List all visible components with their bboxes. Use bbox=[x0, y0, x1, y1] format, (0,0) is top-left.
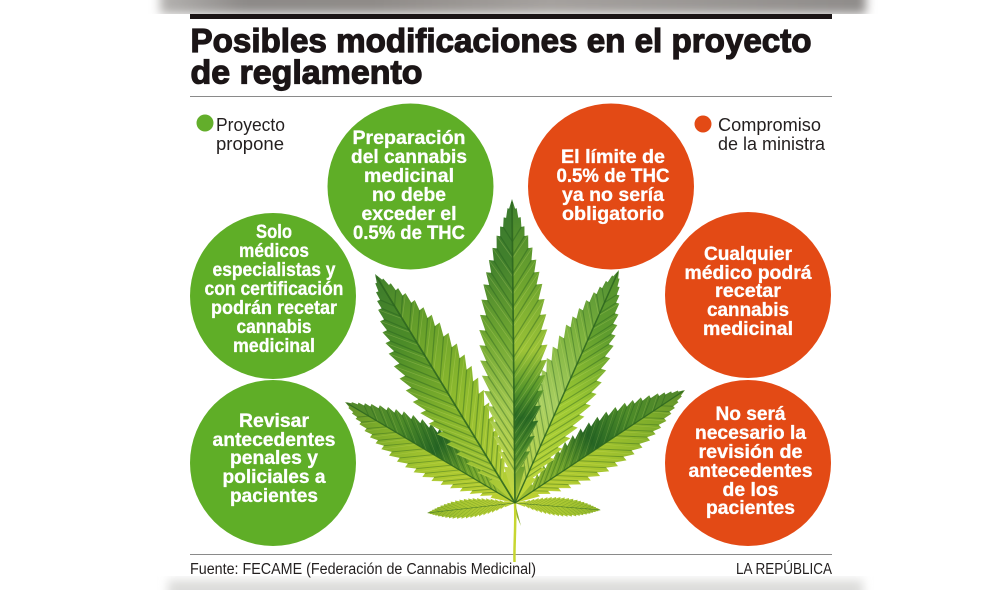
orange circle: no sera necesario: antecedentes bbox=[688, 461, 812, 482]
orange circle: cualquier medico: cannabis bbox=[707, 300, 789, 321]
heading bar bbox=[190, 14, 832, 19]
green circle: medicos: médicos bbox=[239, 241, 309, 262]
green circle: preparacion: 0.5% de THC bbox=[353, 223, 465, 244]
orange circle: no sera necesario: necesario la bbox=[695, 423, 806, 444]
title: de reglamento bbox=[190, 54, 422, 92]
orange circle: no sera necesario: pacientes bbox=[706, 498, 795, 519]
orange circle: limite: obligatorio bbox=[562, 204, 664, 225]
green circle: antecedentes: Revisar bbox=[239, 411, 310, 432]
orange circle: limite: El límite de bbox=[561, 147, 665, 168]
green circle: antecedentes: policiales a bbox=[222, 467, 326, 488]
legend: proyecto propone bbox=[196, 114, 285, 154]
green circle: antecedentes bbox=[190, 380, 356, 546]
credit text: LA REPÚBLICA bbox=[736, 561, 833, 578]
legend: proyecto propone: propone bbox=[216, 134, 284, 154]
green circle: preparacion: no debe bbox=[372, 185, 446, 206]
legend: compromiso de la ministra bbox=[694, 115, 826, 154]
background: blurred bottom band bbox=[168, 580, 863, 590]
orange circle: limite: ya no sería bbox=[562, 185, 664, 206]
title bbox=[190, 23, 812, 92]
orange circle: cualquier medico: Cualquier bbox=[704, 244, 793, 265]
orange circle: no sera necesario bbox=[665, 380, 831, 546]
orange circle: limite bbox=[528, 104, 694, 270]
legend: proyecto propone: Proyecto bbox=[216, 115, 285, 135]
green circle: preparacion: Preparación bbox=[352, 128, 466, 149]
green circle: medicos: cannabis bbox=[236, 317, 312, 338]
green circle: antecedentes: pacientes bbox=[230, 486, 318, 507]
green circle: medicos bbox=[190, 213, 356, 379]
green circle: preparacion: del cannabis bbox=[351, 147, 467, 168]
orange circle: cualquier medico: recetar bbox=[715, 281, 782, 302]
orange circle: no sera necesario: de los bbox=[722, 480, 778, 501]
legend: compromiso de la ministra: Compromiso bbox=[718, 115, 821, 135]
green circle: antecedentes: penales y bbox=[230, 448, 318, 469]
orange circle: limite: 0.5% de THC bbox=[556, 166, 670, 187]
green circle: preparacion: exceder el bbox=[362, 204, 456, 225]
background: blurred top band bbox=[160, 0, 866, 14]
footer rule bbox=[190, 554, 832, 555]
icon: cannabis leaf bbox=[332, 199, 700, 562]
green circle: medicos: Solo bbox=[256, 222, 292, 243]
orange circle: cualquier medico: medicinal bbox=[703, 319, 793, 340]
green circle: medicos: especialistas y bbox=[212, 260, 336, 281]
green circle: medicos: medicinal bbox=[233, 336, 315, 357]
orange circle: cualquier medico bbox=[665, 212, 831, 378]
green circle: medicos: con certificación bbox=[204, 279, 344, 300]
green circle: antecedentes: antecedentes bbox=[212, 430, 336, 451]
orange circle: no sera necesario: No será bbox=[716, 404, 786, 425]
green circle: preparacion: medicinal bbox=[364, 166, 454, 187]
title: Posibles modificaciones en el proyecto bbox=[190, 23, 812, 60]
orange circle: no sera necesario: revisión de bbox=[698, 442, 802, 463]
legend: compromiso de la ministra: de la ministra bbox=[718, 134, 826, 154]
orange circle: cualquier medico: médico podrá bbox=[684, 263, 812, 284]
green circle: medicos: podrán recetar bbox=[211, 298, 338, 319]
source text: Fuente: FECAME (Federación de Cannabis Medicinal) bbox=[190, 561, 536, 578]
green circle: preparacion bbox=[328, 104, 494, 270]
